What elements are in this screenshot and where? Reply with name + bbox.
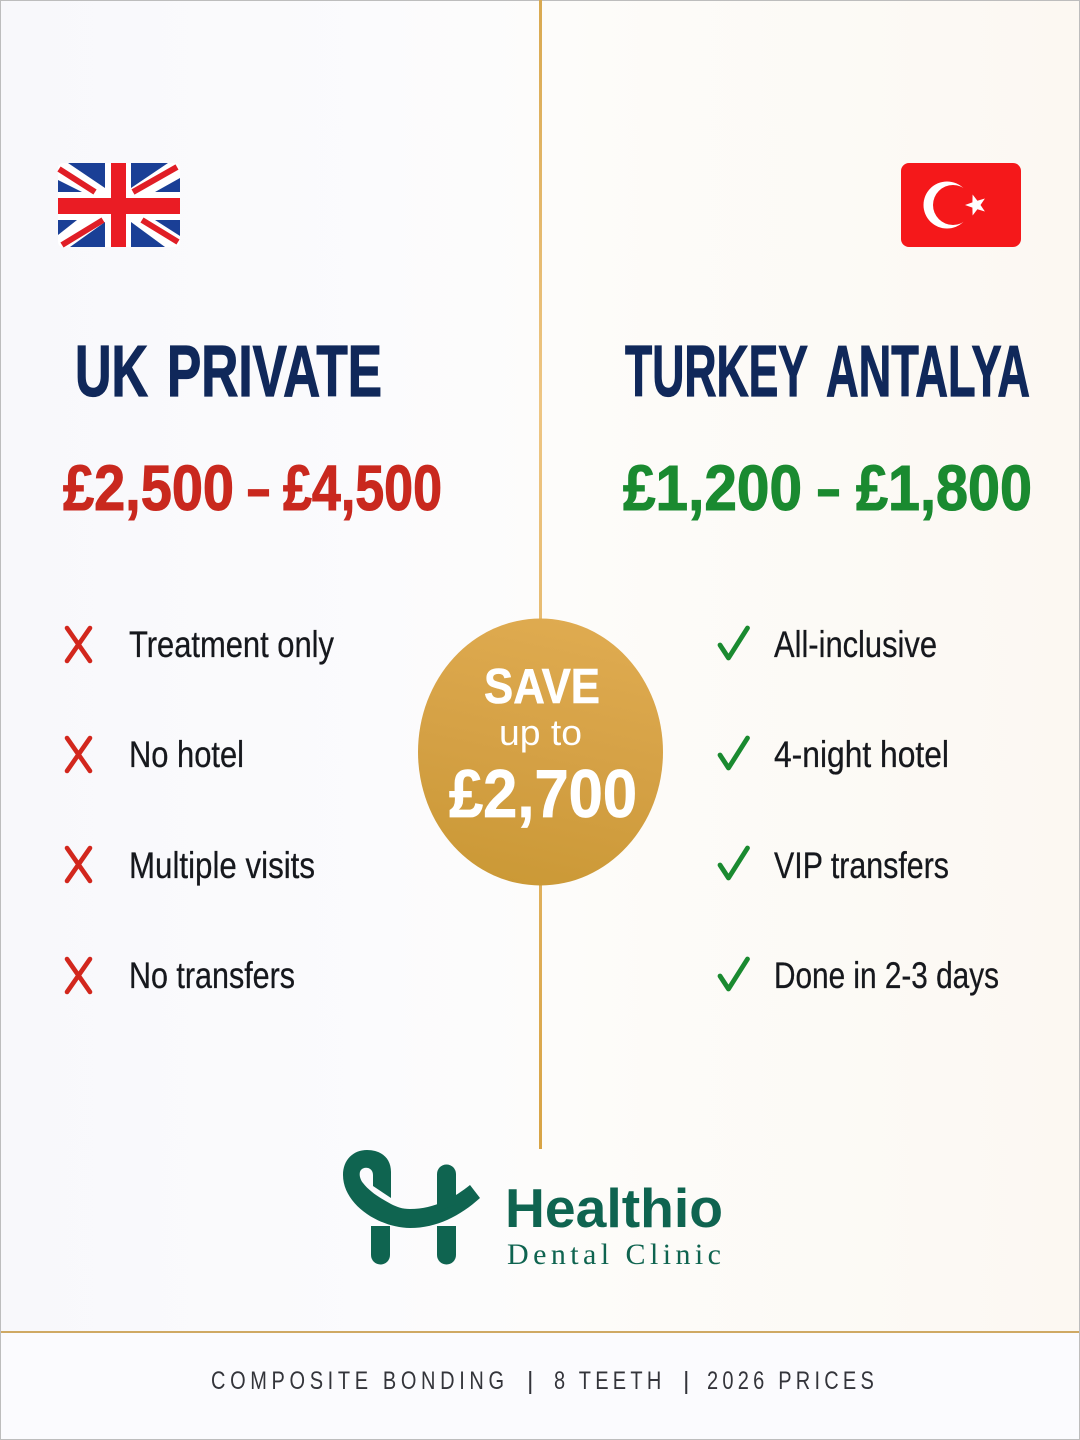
badge text: up to: up to: [499, 712, 582, 753]
icon: check 4: [720, 959, 748, 989]
price: Turkey: [623, 452, 1032, 524]
text: done in 2-3 days: Done in 2-3 days: [774, 955, 999, 996]
price: UK: [63, 452, 442, 524]
icon: cross 3: [67, 848, 90, 881]
footer text: 8 TEETH: [554, 1367, 666, 1395]
logo text: Dental Clinic: Dental Clinic: [507, 1238, 721, 1271]
text: no hotel: No hotel: [129, 734, 244, 775]
panel: footer background: [0, 1331, 1080, 1440]
logo text: Healthio: Healthio: [505, 1177, 723, 1239]
badge text: save: SAVE: [484, 660, 600, 714]
price: Turkey: £1,200: [623, 452, 802, 524]
center gold divider: [539, 0, 542, 1149]
footer text: [211, 1367, 878, 1395]
price: UK: –: [247, 452, 270, 524]
callout: savings badge: [418, 618, 663, 886]
price: Turkey: £1,800: [856, 452, 1032, 524]
list: Turkey benefits: [720, 624, 999, 996]
text: 4-night hotel: 4-night hotel: [774, 734, 949, 775]
footer text: |: [683, 1367, 690, 1395]
icon: UK flag: [58, 163, 180, 247]
text: all-inclusive: All-inclusive: [774, 624, 937, 665]
text: no transfers: No transfers: [129, 955, 295, 996]
icon: check 2: [720, 738, 748, 768]
footer text: |: [527, 1367, 534, 1395]
heading: UK private: PRIVATE: [167, 332, 382, 412]
icon: cross 1: [67, 628, 90, 661]
panel: Turkey background: [540, 0, 1080, 1331]
footer text: COMPOSITE BONDING: [211, 1367, 509, 1395]
heading: Turkey Antalya: TURKEY: [625, 332, 808, 412]
footer text: 2026 PRICES: [707, 1367, 878, 1395]
logo: Healthio Dental Clinic: [343, 1150, 723, 1271]
text: treatment only: Treatment only: [129, 624, 334, 665]
icon: cross 2: [67, 738, 90, 771]
price: Turkey: –: [817, 452, 840, 524]
list: UK drawbacks: [67, 624, 334, 996]
badge text: amount: £2,700: [449, 756, 637, 832]
logo mark: [343, 1150, 480, 1265]
text: multiple visits: Multiple visits: [129, 845, 315, 886]
footer gold rule: [1, 1331, 1079, 1333]
text: VIP transfers: VIP transfers: [774, 845, 949, 886]
icon: check 1: [720, 628, 748, 658]
heading: UK private: [75, 332, 382, 412]
icon: Turkey flag: [901, 163, 1021, 247]
price: UK: £2,500: [63, 452, 234, 524]
panel: UK background: [0, 0, 540, 1331]
heading: UK private: UK: [75, 332, 148, 412]
price: UK: £4,500: [283, 452, 442, 524]
icon: check 3: [720, 848, 748, 878]
icon: cross 4: [67, 959, 90, 992]
